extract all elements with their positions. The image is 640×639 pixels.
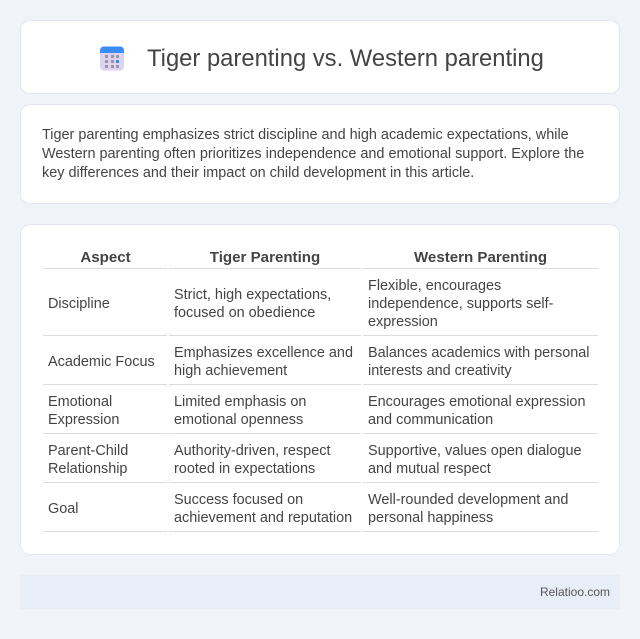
row: discipline: independence, supports self- bbox=[368, 296, 553, 312]
table header bbox=[80, 249, 547, 266]
row: discipline: focused on obedience bbox=[174, 305, 315, 321]
row: goal: Well-rounded development and bbox=[368, 492, 568, 508]
row: emotional expression: Expression bbox=[48, 412, 119, 428]
panel: comparison table bbox=[20, 224, 620, 555]
intro text: Tiger parenting emphasizes strict discipline and high academic expectations, while bbox=[42, 127, 569, 143]
row: emotional expression: and communication bbox=[368, 412, 493, 428]
column heading: tiger parenting: Tiger Parenting bbox=[210, 249, 320, 266]
column heading: aspect: Aspect bbox=[80, 249, 131, 266]
intro text bbox=[42, 127, 584, 181]
intro text: key differences and their impact on child development in this article. bbox=[42, 165, 474, 181]
row: discipline: Discipline bbox=[48, 296, 110, 312]
row: emotional expression: Emotional bbox=[48, 394, 112, 410]
title: Tiger parenting vs. Western parenting bbox=[147, 45, 544, 72]
intro text: Western parenting often prioritizes independence and emotional support. Explore the bbox=[42, 146, 584, 162]
row: parent-child relationship: rooted in expectations bbox=[174, 461, 315, 477]
icon: calendar bbox=[100, 46, 124, 70]
row: goal: achievement and reputation bbox=[174, 510, 352, 526]
row: goal: Success focused on bbox=[174, 492, 303, 508]
column heading: western parenting: Western Parenting bbox=[414, 249, 547, 266]
row: discipline: Strict, high expectations, bbox=[174, 287, 331, 303]
panel: title card bbox=[20, 20, 620, 94]
footer bar bbox=[20, 575, 620, 609]
row: emotional expression: Encourages emotional expression bbox=[368, 394, 586, 410]
row: parent-child relationship bbox=[48, 443, 582, 477]
row: academic focus: Balances academics with personal bbox=[368, 345, 590, 361]
row: goal: personal happiness bbox=[368, 510, 493, 526]
panel: introduction bbox=[20, 104, 620, 204]
row: parent-child relationship: Relationship bbox=[48, 461, 127, 477]
row: parent-child relationship: Supportive, values open dialogue bbox=[368, 443, 582, 459]
row: goal bbox=[48, 492, 568, 526]
row: academic focus: Academic Focus bbox=[48, 354, 155, 370]
row: parent-child relationship: and mutual respect bbox=[368, 461, 491, 477]
footer text: Relatioo.com bbox=[540, 585, 610, 599]
row: parent-child relationship: Authority-driven, respect bbox=[174, 443, 330, 459]
row: emotional expression bbox=[48, 394, 586, 428]
row: academic focus bbox=[48, 345, 590, 379]
row: emotional expression: Limited emphasis on bbox=[174, 394, 306, 410]
row: discipline: expression bbox=[368, 314, 438, 330]
row: discipline bbox=[48, 278, 553, 330]
row: emotional expression: emotional openness bbox=[174, 412, 303, 428]
row: academic focus: Emphasizes excellence and bbox=[174, 345, 353, 361]
row: goal: Goal bbox=[48, 501, 78, 517]
row: discipline: Flexible, encourages bbox=[368, 278, 501, 294]
row: parent-child relationship: Parent-Child bbox=[48, 443, 128, 459]
row: academic focus: high achievement bbox=[174, 363, 287, 379]
row: academic focus: interests and creativity bbox=[368, 363, 512, 379]
